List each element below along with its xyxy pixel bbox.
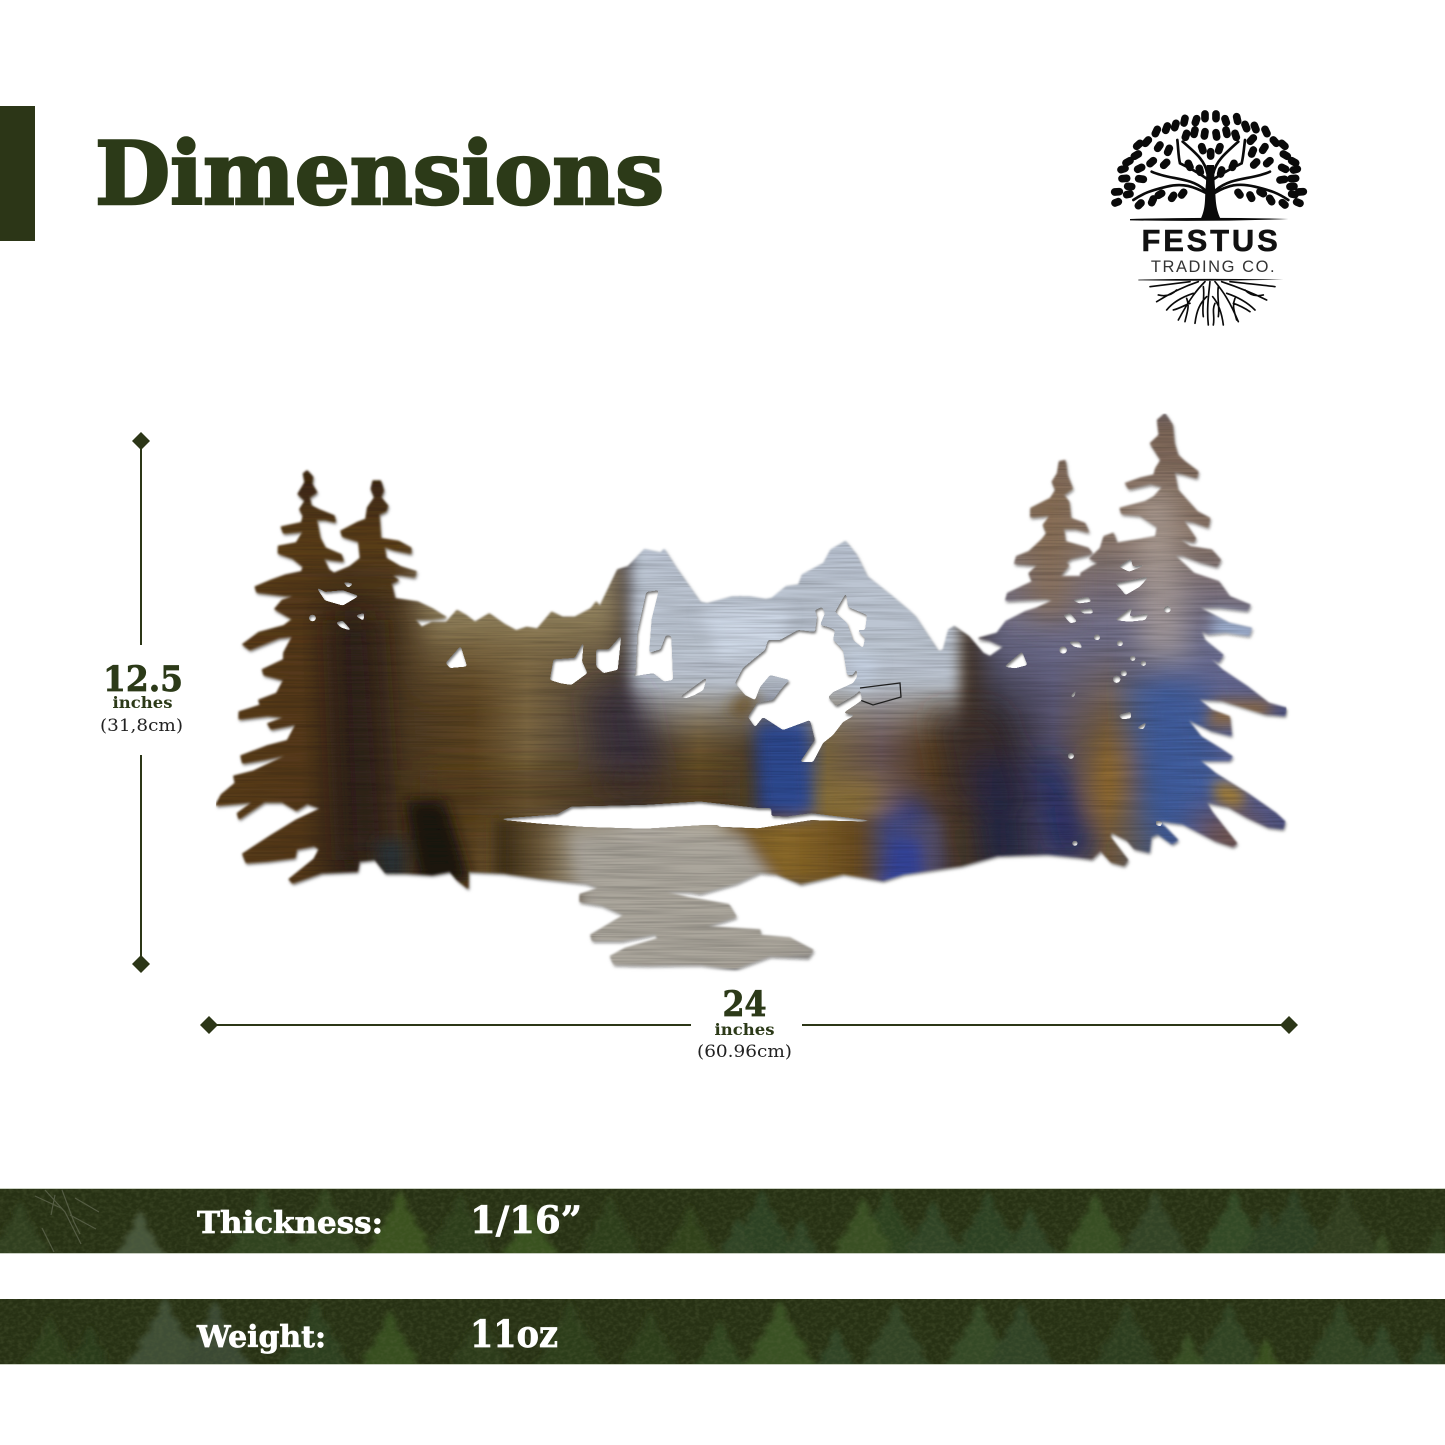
metric 31,8cm: (31,8cm) [100,716,183,736]
width dimension [200,984,1298,1062]
diamond markers [132,432,150,973]
logo: Festus Trading Co. [1115,114,1303,325]
value: 11oz [470,1312,558,1356]
height line [140,441,142,964]
unit inches: inches [112,693,173,712]
value 12.5: 12.5 [103,659,183,700]
icon: tree [1115,114,1303,221]
info bar: thickness [0,1188,1445,1254]
forest texture [0,1188,1445,1254]
metric 60.96cm: (60.96cm) [697,1042,792,1062]
unit inches: inches [714,1020,775,1039]
forest texture [0,1299,1445,1365]
info bar: weight [0,1299,1445,1365]
width line [209,1024,1289,1026]
title: Dimensions [95,122,664,225]
height dimension [100,432,183,973]
value: 1/16” [470,1198,582,1242]
label: Weight: [196,1320,326,1355]
value 24: 24 [722,984,766,1025]
brand name: FESTUS [1141,223,1281,258]
diamond markers [200,1016,1298,1034]
icon: roots [1138,279,1283,325]
tagline: TRADING CO. [1151,258,1276,276]
accent bar [0,106,35,241]
metal wall art: mountain lake and pines [216,414,1289,972]
label: Thickness: [197,1206,383,1241]
